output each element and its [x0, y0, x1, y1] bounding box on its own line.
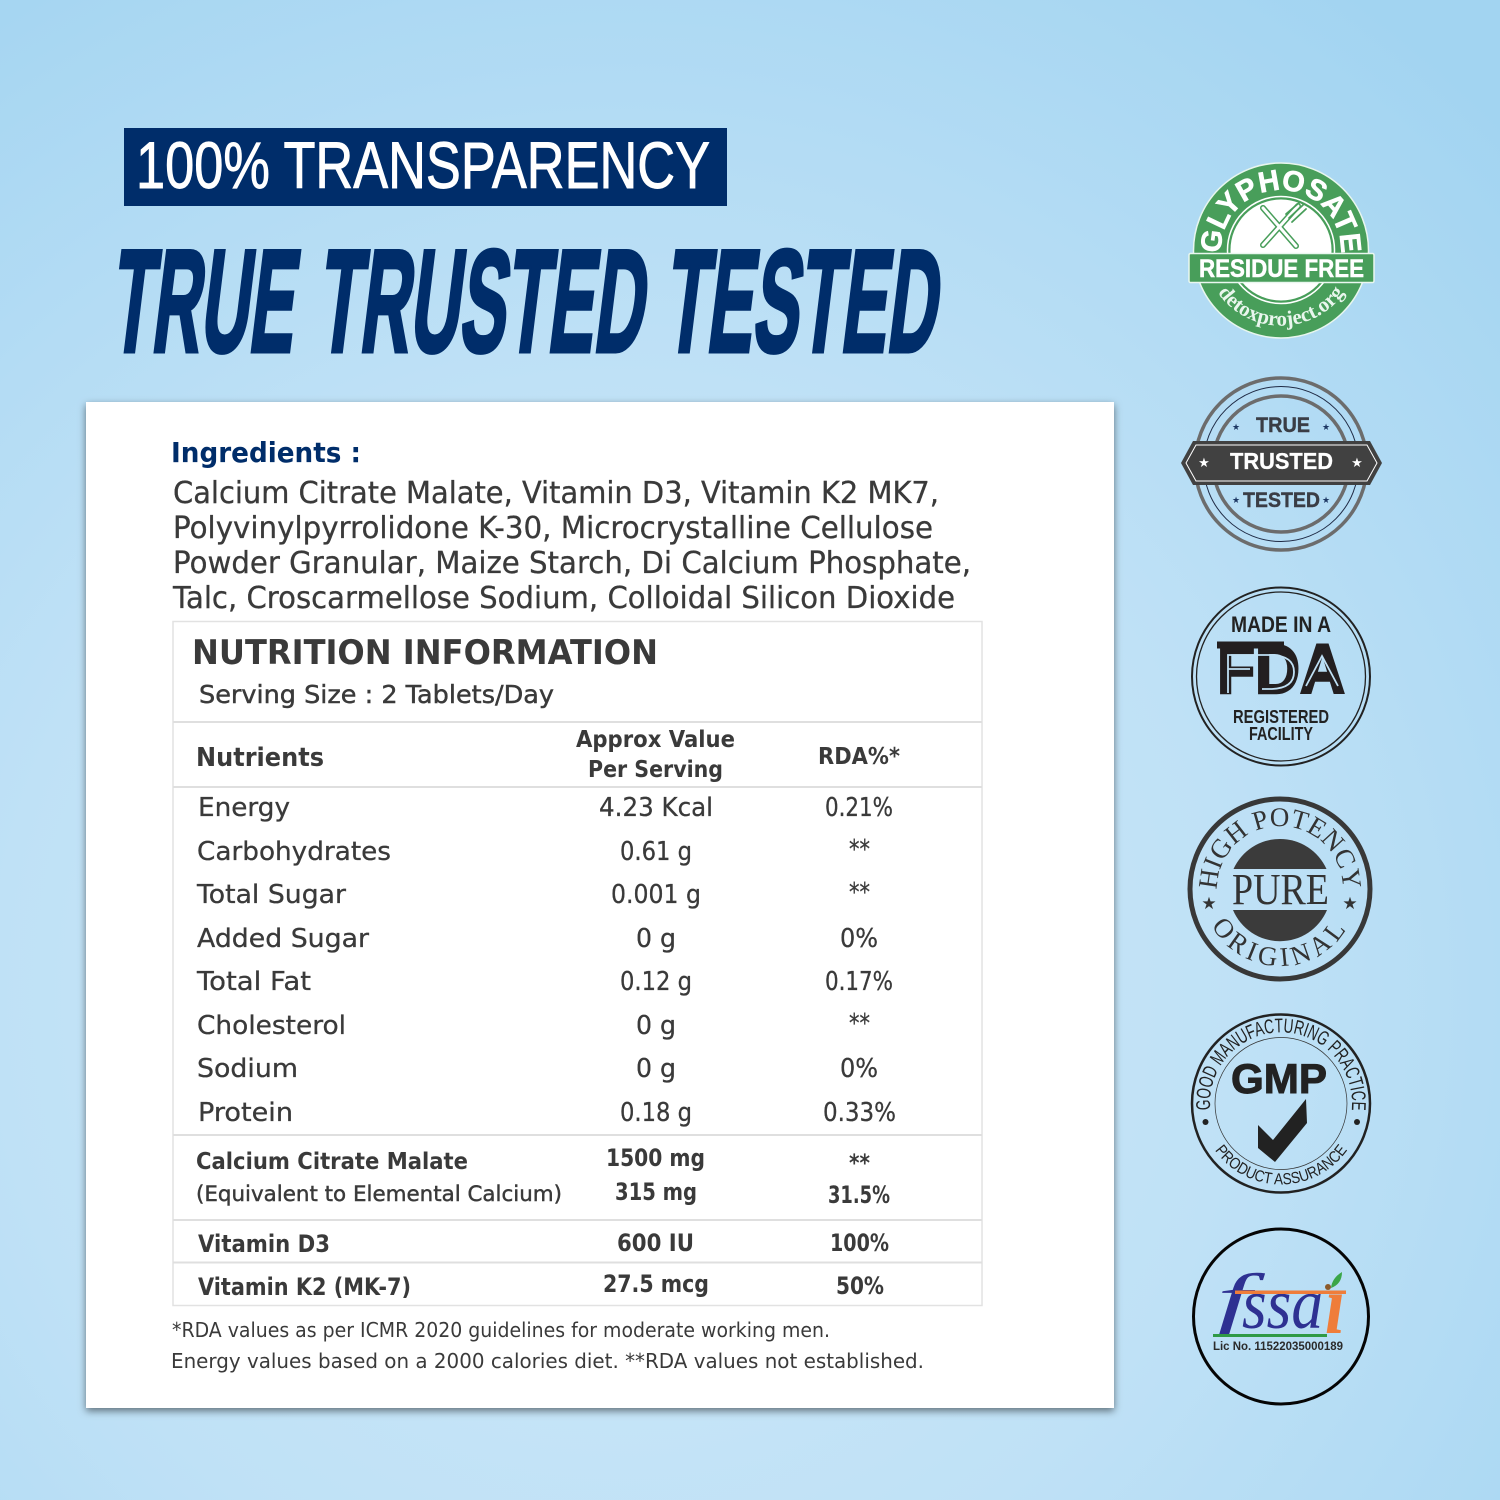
- nutrient rows: 0.12 g: [620, 967, 692, 997]
- footnotes: *RDA values as per ICMR 2020 guidelines for moderate working men.: [172, 1318, 830, 1342]
- badge: made in a fda registered facility: [1192, 588, 1370, 766]
- badge: gmp: [1190, 1013, 1372, 1194]
- heading: ingredients: Ingredients :: [171, 436, 361, 469]
- row: vitamin k2: [198, 1270, 884, 1301]
- nutrient rows: 0.001 g: [611, 880, 701, 910]
- badge: high potency pure original: [1188, 796, 1372, 982]
- headline: true trusted tested: TRUSTED: [312, 220, 658, 383]
- badge: high potency pure original: PURE: [1232, 865, 1329, 914]
- row: calcium citrate malate: 1500 mg: [606, 1144, 705, 1172]
- badge: true trusted tested: TRUE: [1256, 414, 1310, 437]
- badge: gmp: GOOD MANUFACTURING PRACTICE: [1196, 1018, 1366, 1110]
- row: vitamin d3: 100%: [830, 1229, 889, 1257]
- row: calcium citrate malate: [196, 1144, 890, 1209]
- badge: true trusted tested: ★: [1351, 456, 1363, 471]
- ingredients list: [172, 476, 971, 616]
- icon: fda logo stripes: [1217, 645, 1338, 693]
- badge: glyphosate residue free: [1188, 162, 1375, 339]
- nutrient rows: Total Sugar: [196, 880, 346, 910]
- badge: true trusted tested: ★: [1232, 496, 1240, 506]
- row: vitamin d3: [198, 1229, 889, 1258]
- badge: made in a fda registered facility: MADE IN A: [1231, 612, 1331, 637]
- row: calcium citrate malate: (Equivalent to Elemental Calcium): [196, 1182, 562, 1207]
- nutrient rows: Sodium: [197, 1054, 298, 1084]
- badge: high potency pure original: ★: [1201, 894, 1217, 914]
- icon: crossed fork and knife: [1263, 202, 1306, 246]
- column headers: Per Serving: [588, 757, 723, 783]
- nutrient rows: 0 g: [636, 924, 676, 954]
- badge: fssai: Lic No. 11522035000189: [1213, 1341, 1343, 1353]
- nutrient rows: Carbohydrates: [197, 837, 391, 867]
- badge: true trusted tested: ★: [1198, 456, 1210, 471]
- badge: fssai: [1194, 1229, 1368, 1404]
- nutrient rows: Energy: [198, 793, 290, 823]
- headline: true trusted tested: [105, 220, 951, 383]
- banner: 100% transparency: 100% TRANSPARENCY: [136, 128, 710, 202]
- nutrient rows: 0%: [840, 924, 878, 954]
- nutrient rows: Cholesterol: [197, 1011, 346, 1041]
- row: calcium citrate malate: **: [849, 1149, 870, 1177]
- row: calcium citrate malate: 31.5%: [828, 1181, 890, 1209]
- icon: check mark: [1258, 1099, 1307, 1162]
- badge: fssai: ssa: [1242, 1264, 1323, 1344]
- badge: true trusted tested: TRUSTED: [1230, 448, 1333, 474]
- badge: made in a fda registered facility: FACILITY: [1249, 724, 1313, 744]
- nutrient rows: **: [849, 878, 870, 908]
- nutrient rows: 0%: [840, 1054, 878, 1084]
- ingredients list: Powder Granular, Maize Starch, Di Calcium Phosphate,: [173, 546, 971, 581]
- nutrient rows: 0.61 g: [620, 837, 692, 867]
- badge: fssai: f: [1217, 1261, 1266, 1338]
- badge: glyphosate residue free: GLYPHOSATE: [1200, 170, 1362, 253]
- nutrient rows: Protein: [198, 1098, 293, 1128]
- badge: true trusted tested: [1181, 378, 1382, 550]
- badge: glyphosate residue free: RESIDUE FREE: [1199, 255, 1364, 283]
- ingredients list: Talc, Croscarmellose Sodium, Colloidal Silicon Dioxide: [172, 581, 955, 616]
- panel: ingredients and nutrition: [86, 402, 1114, 1408]
- nutrient rows: 0.33%: [823, 1098, 896, 1128]
- nutrient rows: Added Sugar: [197, 924, 369, 954]
- ingredients list: Calcium Citrate Malate, Vitamin D3, Vitamin K2 MK7,: [173, 476, 939, 511]
- table heading: NUTRITION INFORMATION: [192, 633, 658, 673]
- badge: glyphosate residue free: detoxproject.org: [1220, 286, 1346, 330]
- badge: high potency pure original: HIGH POTENCY: [1198, 808, 1362, 889]
- nutrient rows: 0 g: [636, 1011, 676, 1041]
- nutrient rows: Total Fat: [196, 967, 311, 997]
- row: calcium citrate malate: Calcium Citrate Malate: [196, 1149, 468, 1175]
- text: TESTED: [659, 220, 951, 383]
- column headers: [196, 727, 900, 783]
- row: vitamin k2: 50%: [836, 1272, 884, 1300]
- nutrient rows: **: [849, 1009, 870, 1039]
- row: vitamin d3: Vitamin D3: [198, 1230, 330, 1258]
- nutrient rows: 4.23 Kcal: [599, 793, 713, 823]
- nutrient rows: 0.17%: [825, 967, 893, 997]
- row: calcium citrate malate: 315 mg: [615, 1178, 697, 1206]
- row: vitamin k2: Vitamin K2 (MK-7): [198, 1273, 411, 1301]
- badge: gmp: GMP: [1231, 1055, 1327, 1102]
- badge: high potency pure original: ★: [1342, 894, 1358, 914]
- row: vitamin d3: 600 IU: [617, 1229, 694, 1257]
- icon: leaf: [1331, 1272, 1342, 1288]
- badge: true trusted tested: ★: [1232, 423, 1240, 433]
- nutrient rows: 0.18 g: [620, 1098, 692, 1128]
- serving size: Serving Size : 2 Tablets/Day: [199, 680, 554, 709]
- column headers: RDA%*: [818, 744, 900, 770]
- badge: gmp: PRODUCT ASSURANCE: [1216, 1144, 1348, 1184]
- badge: high potency pure original: ORIGINAL: [1214, 919, 1346, 966]
- badge: true trusted tested: TESTED: [1243, 489, 1320, 512]
- badge: true trusted tested: ★: [1322, 496, 1330, 506]
- footnotes: Energy values based on a 2000 calories diet. **RDA values not established.: [171, 1349, 924, 1373]
- badge: fssai: ı: [1325, 1259, 1345, 1352]
- badge: made in a fda registered facility: FDA: [1217, 630, 1345, 708]
- nutrition table: [173, 622, 982, 1306]
- ingredients list: Polyvinylpyrrolidone K-30, Microcrystalline Cellulose: [173, 511, 933, 546]
- badge: true trusted tested: ★: [1322, 423, 1330, 433]
- nutrient rows: 0.21%: [825, 793, 893, 823]
- headline: true trusted tested: TRUE: [105, 220, 308, 383]
- nutrient rows: 0 g: [636, 1054, 676, 1084]
- badge: made in a fda registered facility: REGISTERED: [1233, 707, 1329, 727]
- nutrient rows: **: [849, 835, 870, 865]
- row: vitamin k2: 27.5 mcg: [603, 1270, 709, 1298]
- nutrient rows: [196, 793, 896, 1128]
- column headers: Nutrients: [196, 743, 324, 773]
- footnotes: [171, 1318, 924, 1373]
- column headers: Approx Value: [576, 727, 735, 753]
